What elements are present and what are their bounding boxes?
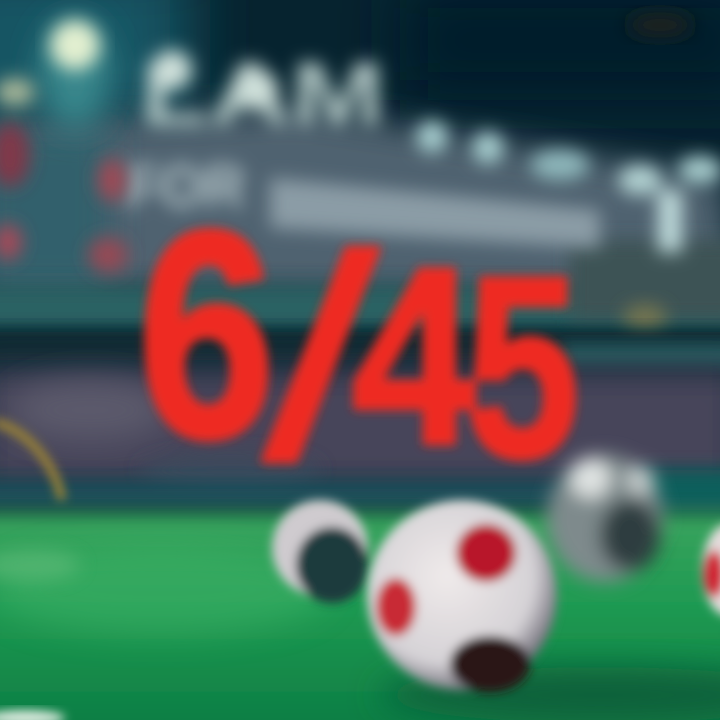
blurred heading line 2: FOR: [125, 153, 245, 220]
blurred heading line 2: [125, 153, 600, 248]
blurred heading line 1: [140, 45, 720, 252]
pitch: [0, 512, 720, 720]
soccer ball: far right edge: [702, 524, 720, 616]
blurred heading line 1: LAM: [140, 45, 385, 145]
soccer ball: centre, red spots: [367, 500, 557, 692]
soccer ball: left: [272, 500, 368, 603]
main figure: 6/45: 4: [352, 216, 475, 497]
main figure: 6/45: 6: [138, 171, 275, 499]
crowd: [0, 368, 720, 510]
main figure: 6/45: 5: [466, 223, 579, 511]
main figure: 6/45: [138, 171, 579, 516]
red marks at left: [0, 78, 128, 273]
gold arc: [0, 422, 62, 500]
soccer ball: right, grey: [547, 454, 663, 582]
floodlight: [39, 20, 111, 130]
stadium stands band: [0, 110, 720, 365]
main figure: 6/45: /: [249, 197, 393, 516]
